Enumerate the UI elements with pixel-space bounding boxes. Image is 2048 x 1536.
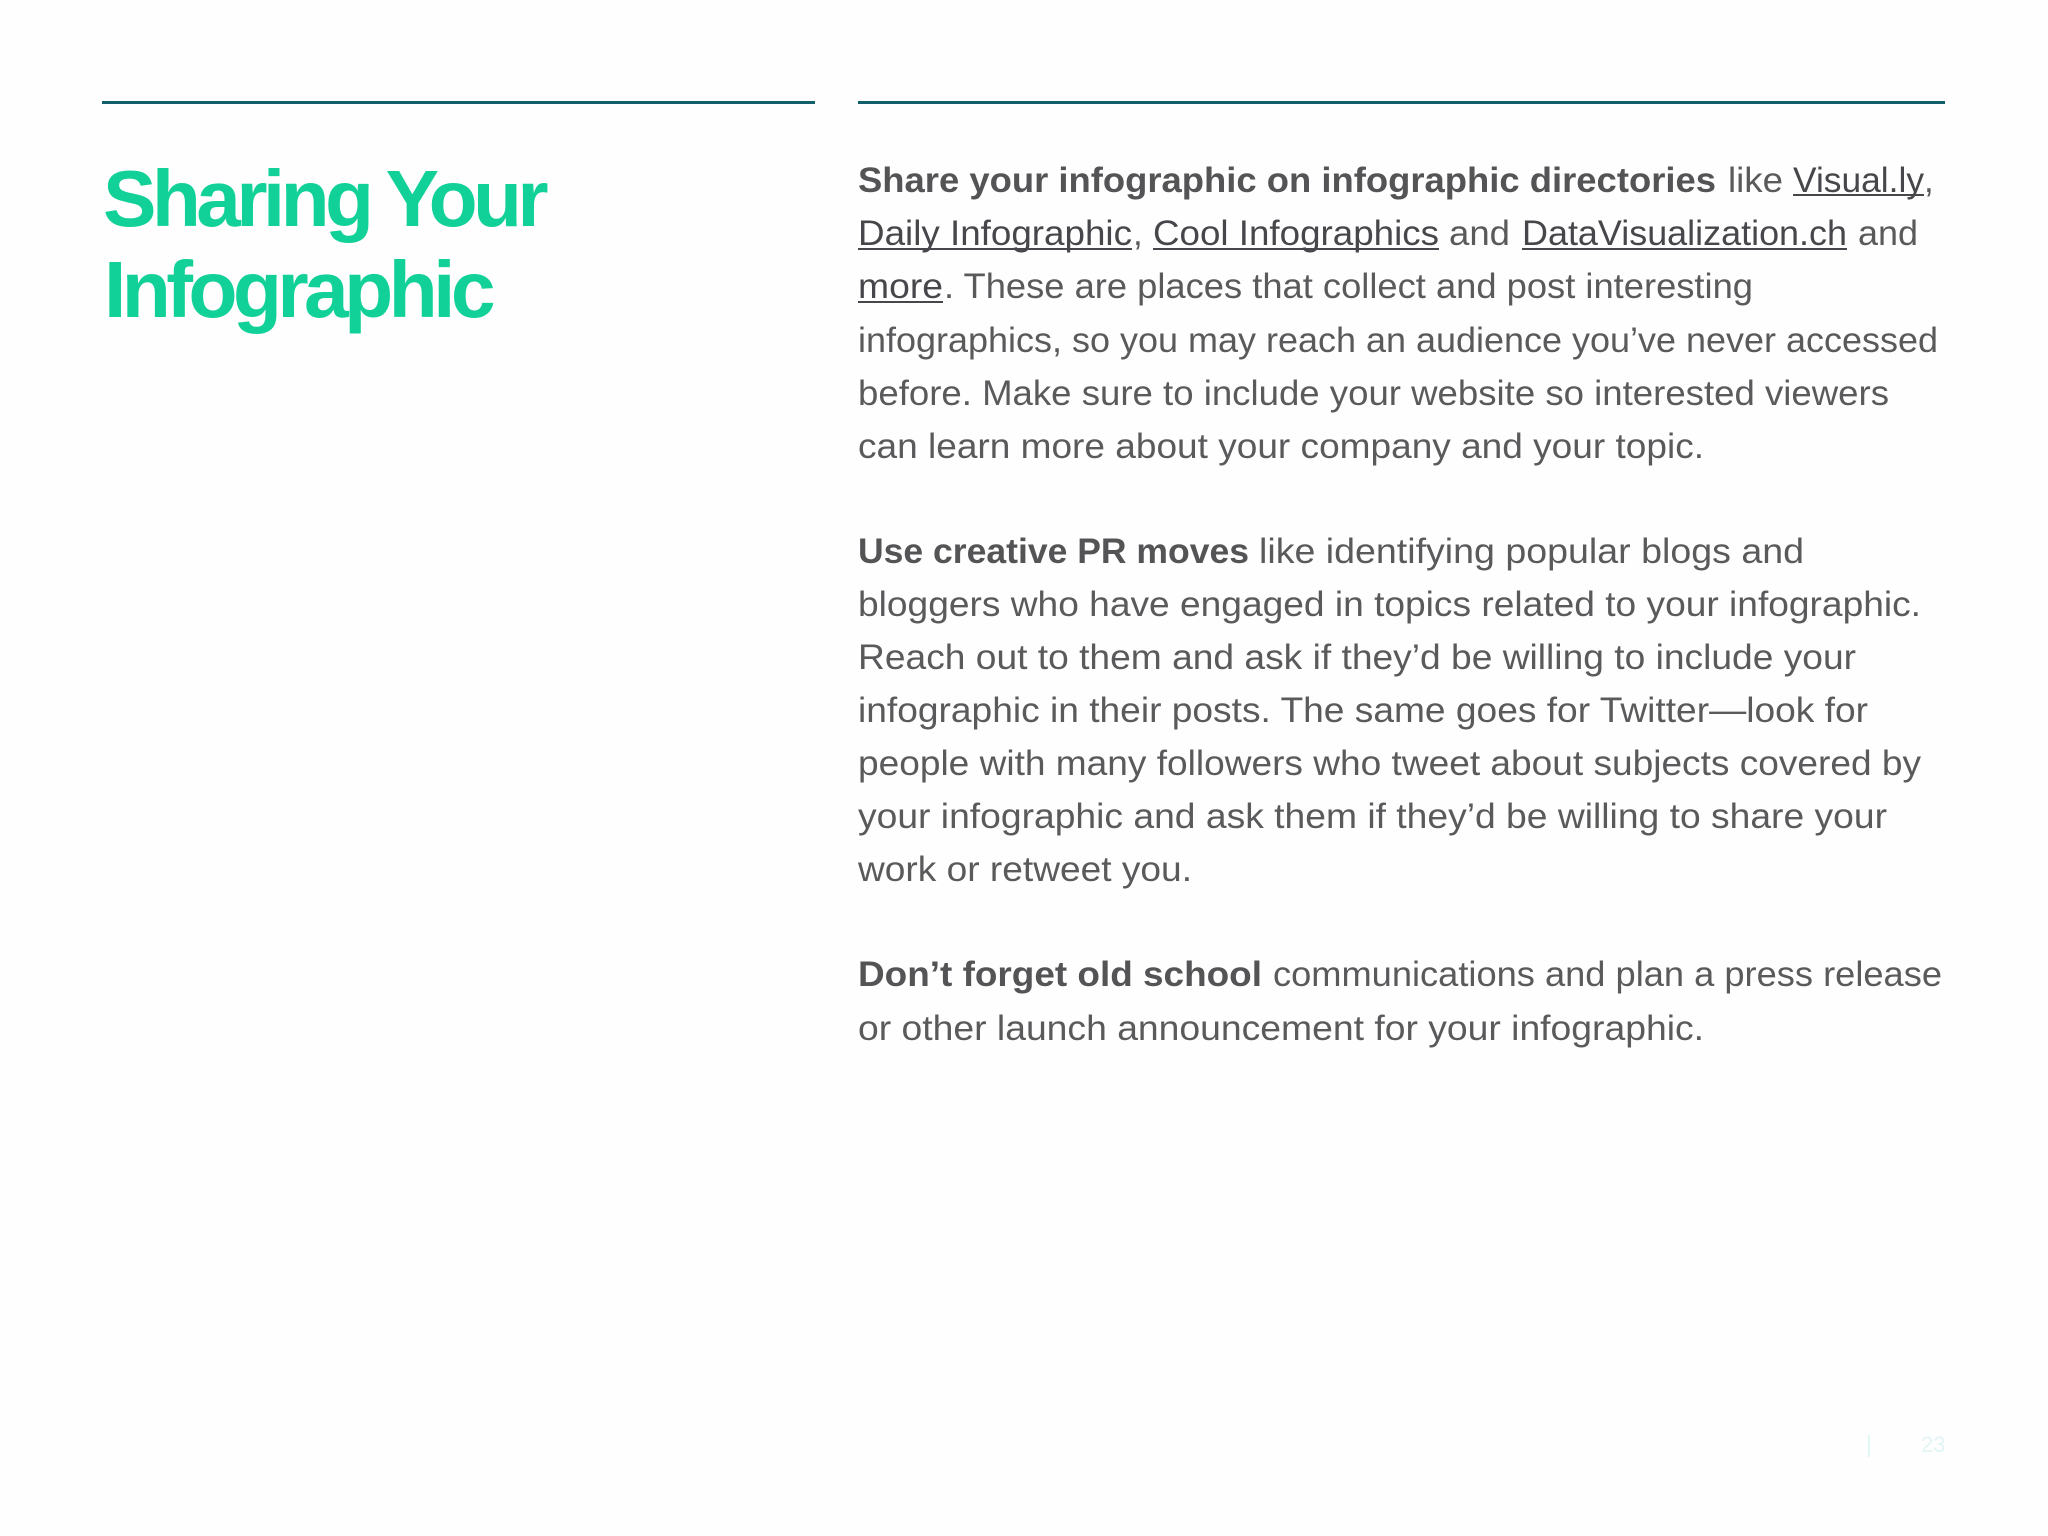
title bbox=[103, 154, 547, 334]
text block: creative PR moves: people with many followers who tweet about subjects covered by bbox=[858, 744, 1922, 783]
text block: infographic directories: like bbox=[1728, 161, 1783, 200]
text block: old school communications: Don’t forget old school bbox=[858, 955, 1262, 994]
text block: creative PR moves bbox=[857, 532, 1922, 889]
text block: infographic directories: more bbox=[858, 267, 943, 306]
text block: infographic directories: Daily Infographic bbox=[858, 214, 1132, 253]
text block: old school communications: or other launch announcement for your infographic. bbox=[858, 1009, 1704, 1048]
text block: infographic directories: infographics, so you may reach an audience you’ve never accessed bbox=[858, 321, 1938, 360]
text block: infographic directories: and bbox=[1449, 214, 1510, 253]
title: Infographic bbox=[104, 245, 494, 334]
text block: infographic directories: can learn more about your company and your topic. bbox=[858, 427, 1704, 466]
text block: infographic directories: Share your infographic on infographic directories bbox=[858, 161, 1716, 200]
text block: creative PR moves: Reach out to them and ask if they’d be willing to include your bbox=[858, 638, 1856, 677]
text block: old school communications bbox=[858, 955, 1942, 1048]
text block: infographic directories: , bbox=[1924, 161, 1934, 200]
text block: creative PR moves: work or retweet you. bbox=[857, 850, 1192, 889]
text block: creative PR moves: bloggers who have engaged in topics related to your infographic. bbox=[858, 585, 1921, 624]
page number bbox=[1868, 1432, 1945, 1457]
text block: infographic directories: before. Make sure to include your website so interested viewers bbox=[858, 374, 1889, 413]
text block: infographic directories: DataVisualization.ch bbox=[1522, 214, 1847, 253]
title: Sharing Your bbox=[103, 154, 547, 243]
text block: infographic directories: . These are places that collect and post interesting bbox=[944, 267, 1753, 306]
text block: infographic directories bbox=[858, 161, 1938, 466]
text block: creative PR moves: like identifying popular blogs and bbox=[1259, 532, 1804, 571]
text block: creative PR moves: infographic in their posts. The same goes for Twitter—look for bbox=[858, 691, 1868, 730]
text block: infographic directories: and bbox=[1858, 214, 1918, 253]
text block: infographic directories: Cool Infographics bbox=[1153, 214, 1439, 253]
page number: 23 bbox=[1921, 1432, 1945, 1457]
text block: infographic directories: Visual.ly bbox=[1793, 161, 1924, 200]
text block: old school communications: communications and plan a press release bbox=[1273, 955, 1942, 994]
text block: infographic directories: , bbox=[1133, 214, 1143, 253]
text block: creative PR moves: Use creative PR moves bbox=[858, 532, 1249, 571]
text block: creative PR moves: your infographic and ask them if they’d be willing to share your bbox=[858, 797, 1887, 836]
